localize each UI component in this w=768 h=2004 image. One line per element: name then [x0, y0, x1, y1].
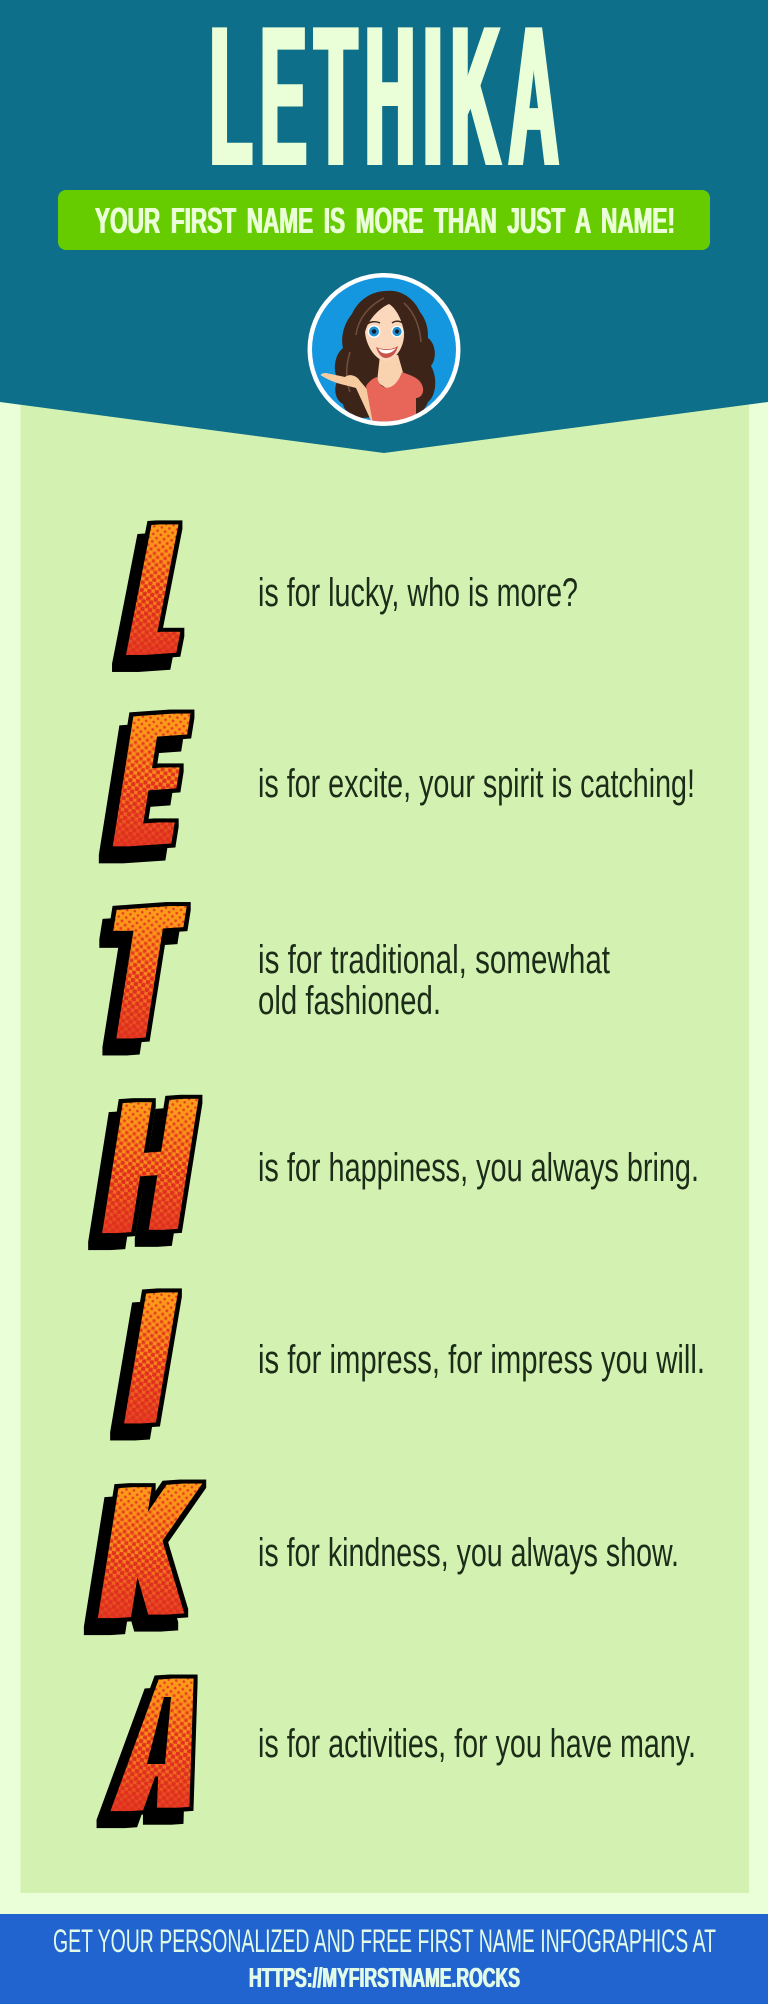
comic letter L [112, 520, 184, 672]
comic letter T: T [97, 865, 186, 1080]
comic letter I: I [118, 1252, 184, 1465]
comic letter L: L [123, 483, 203, 696]
letter T row [99, 902, 610, 1056]
letter E row [98, 710, 692, 864]
comic letter I [110, 1288, 182, 1440]
comic letter E [98, 710, 194, 864]
tagline bar [58, 190, 710, 250]
letter H row [88, 1094, 696, 1250]
footer url: HTTPS://MYFIRSTNAME.ROCKS [249, 1962, 520, 1993]
comic letter K [84, 1480, 206, 1636]
letter A row [96, 1674, 694, 1828]
icon: avatar portrait [308, 273, 460, 426]
comic letter E: E [109, 672, 194, 887]
letter I row [110, 1288, 702, 1440]
letter L row [112, 520, 577, 672]
text: T lines [258, 938, 610, 1023]
text: L line: is for lucky, who is more? [258, 571, 578, 615]
text: T lines: is for traditional, somewhat [258, 938, 610, 982]
comic letter A: A [110, 1635, 216, 1852]
comic letter A [96, 1674, 198, 1828]
comic letter K: K [93, 1442, 203, 1659]
footer [0, 1914, 768, 2004]
header banner [0, 0, 768, 453]
panel: letter list background [20, 380, 749, 1893]
text: T lines: old fashioned. [258, 979, 441, 1023]
comic letter H: H [96, 1057, 205, 1274]
comic letter T [99, 902, 191, 1056]
letter K row [84, 1480, 676, 1636]
comic letter H [88, 1094, 202, 1250]
